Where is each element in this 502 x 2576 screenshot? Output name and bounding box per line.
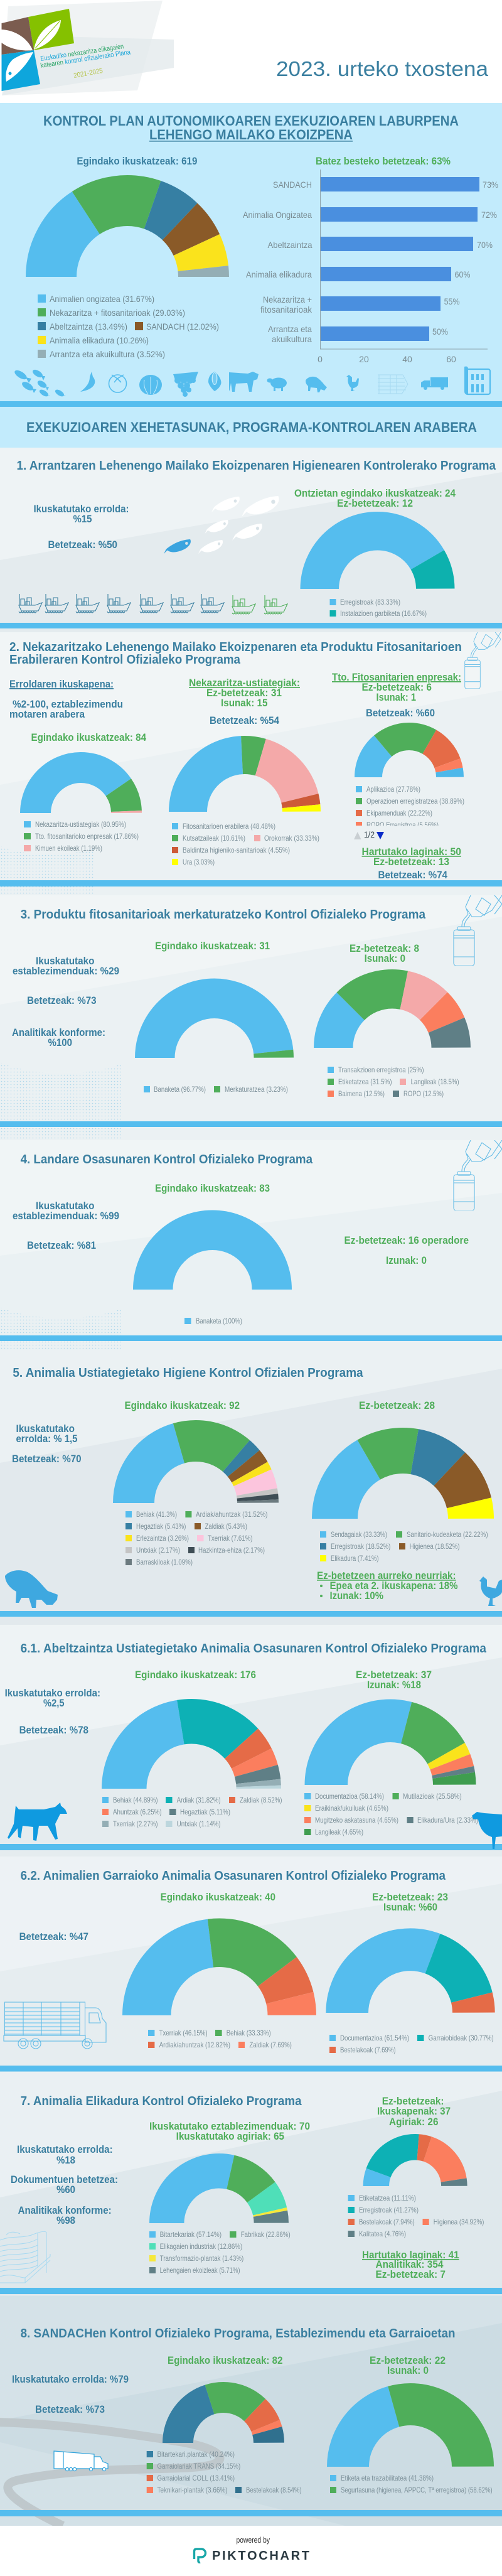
legend: farm donut	[172, 822, 319, 866]
stat: inspections 31: Egindako ikuskatzeak: 31	[155, 940, 270, 952]
legend: species donut: Ardiak/ahuntzak (31.52%)	[196, 1510, 268, 1519]
road	[0, 2422, 220, 2526]
stats: pesticide companies: Ez-betetzeak: 6	[361, 681, 432, 693]
stats: census: Ikuskatutako errolda:	[17, 2143, 113, 2155]
legend: species donut: Zaldiak (5.43%)	[205, 1522, 247, 1531]
icon: sheep	[472, 1812, 502, 1849]
legend: non compliance donut: Baimena (12.5%)	[338, 1089, 385, 1098]
legend: livestock donut: Ahuntzak (6.25%)	[113, 1808, 162, 1816]
stats: non compliance	[344, 1234, 469, 1266]
stats: non compliance: Isunak: %60	[383, 1901, 437, 1913]
chart: establishment donut	[35, 768, 127, 813]
stats: non compliance: Ez-betetzeak: 8	[350, 942, 419, 954]
legend: summary donut: Abeltzaintza (13.49%)	[50, 321, 127, 331]
stats: samples: Ez-betetzeak: 13	[373, 856, 449, 868]
stats: census: Betetzeak: %70	[12, 1453, 82, 1465]
icon: pesticide bottle	[454, 1140, 502, 1210]
stats: census and compliance: %15	[73, 513, 92, 525]
stats: non compliance: Izunak: 0	[386, 1254, 427, 1266]
legend: non compliance donut: Transakzioen erregistroa (25%)	[338, 1065, 424, 1074]
logo: Euskadiko nekazaritza elikagaien	[40, 43, 124, 63]
legend: boat donut: Instalazioen garbiketa (16.67%)	[340, 609, 427, 618]
chart: compliance bars: 60%	[454, 269, 471, 279]
legend: summary donut: SANDACH (12.02%)	[146, 321, 219, 331]
chart: compliance bars: Animalia elikadura	[246, 269, 312, 279]
legend: species donut: Hazkintza-ehiza (2.17%)	[198, 1546, 265, 1555]
legend: non compliance donut	[329, 2034, 494, 2054]
icon: truck	[421, 377, 448, 390]
stats: non compliance: Izunak: %18	[367, 1679, 421, 1691]
stats: samples: Hartutako laginak: 50	[361, 846, 461, 858]
stats: establishments: Betetzeak: %81	[27, 1239, 96, 1251]
legend: non compliance donut: Langileak (18.5%)	[411, 1077, 459, 1086]
stats: pesticide companies	[332, 671, 461, 719]
logo: piktochart: PIKTOCHART	[212, 2549, 309, 2563]
panel: programme 5	[0, 1350, 502, 1625]
stat: inspections: Egindako ikuskatzeak: 619	[77, 155, 197, 167]
legend: farm donut: Kutsatzaileak (10.61%)	[183, 834, 245, 843]
legend: transport donut: Behiak (33.33%)	[227, 2029, 271, 2037]
stats: establishments: establezimenduak: %99	[13, 1210, 119, 1222]
legend: non compliance donut: Sendagaiak (33.33%)	[331, 1530, 387, 1539]
chart: compliance bars: akuikultura	[272, 334, 312, 344]
icon: vending machine	[464, 367, 490, 394]
icon: feed stack	[0, 2231, 50, 2283]
legend: farm donut: Ura (3.03%)	[183, 858, 215, 866]
panel: programme 1	[0, 448, 502, 632]
icon: pig	[306, 377, 327, 392]
legend: SANDACH donut	[147, 2450, 302, 2494]
stats: census	[12, 1423, 82, 1465]
icon: goat	[8, 1803, 67, 1841]
stats: census: Betetzeak: %78	[19, 1724, 88, 1736]
stats: census review: Erroldaren ikuskapena:	[9, 678, 114, 690]
measures list: Epea eta 2. ikuskapena: 18%	[330, 1580, 458, 1592]
legend: non compliance donut: Elikadura/Ura (2.33%)	[417, 1816, 478, 1824]
heading: summary: LEHENGO MAILAKO EKOIZPENA	[149, 127, 353, 143]
icon: grapes	[173, 372, 198, 397]
title: programme 6.1: 6.1. Abeltzaintza Ustiategietako Animalia Osasunaren Kontrol Ofizialeko Programa	[21, 1642, 487, 1656]
icon: lettuce	[139, 375, 162, 395]
stats: non compliance: Ikuskapenak: 37	[377, 2105, 451, 2117]
chart: compliance bars: 55%	[444, 296, 460, 306]
legend: farm donut: Fitosanitarioen erabilera (48.48%)	[183, 822, 275, 831]
panel: programme 2	[0, 632, 502, 895]
legend: feed establishment donut: Fabrikak (22.86%)	[241, 2230, 291, 2239]
panel: programme 6.1	[0, 1625, 502, 1857]
logo: katearen kontrol ofizialerako Plana	[40, 48, 132, 70]
stats: samples: Ez-betetzeak: 7	[375, 2268, 446, 2280]
stat: non compliance 28: Ez-betetzeak: 28	[359, 1399, 435, 1411]
stats: boat inspections	[294, 487, 456, 509]
title: programme 6.2: 6.2. Animalien Garraioko Animalia Osasunaren Kontrol Ofizialeko Programa	[21, 1869, 446, 1883]
icon: pesticide bottle	[465, 632, 501, 689]
legend: non compliance donut: Mutilazioak (25.58%)	[403, 1792, 462, 1801]
stats: census	[11, 2143, 118, 2226]
legend: transport donut: Txerriak (46.15%)	[159, 2029, 208, 2037]
legend: livestock donut: Hegaztiak (5.11%)	[180, 1808, 230, 1816]
chart: non compliance donut	[348, 2405, 473, 2467]
stats: pesticide companies: Isunak: 1	[376, 691, 416, 703]
stats: non compliance: Ez-betetzeak: 23	[372, 1891, 448, 1903]
icon: boats	[19, 594, 287, 614]
icon: corn	[208, 372, 222, 391]
legend: non compliance donut: Bestelakoak (7.69%)	[340, 2045, 396, 2054]
stats: census	[12, 2373, 129, 2415]
chart: non compliance donut	[326, 1721, 454, 1785]
stats: farms: Betetzeak: %54	[210, 714, 279, 726]
chart: compliance bars: SANDACH	[273, 180, 312, 190]
title: programme 2	[9, 640, 462, 667]
legend: species donut: Hegaztiak (5.43%)	[136, 1522, 186, 1531]
stats: census and compliance: Ikuskatutako errolda:	[34, 503, 129, 515]
panel: summary	[0, 103, 502, 448]
stats: establishments: Analitikak konforme:	[12, 1027, 105, 1038]
legend: boat donut: Erregistroak (83.33%)	[340, 598, 400, 606]
chart: compliance bars: Abeltzaintza	[267, 240, 312, 250]
legend: pesticide company donut: Aplikazioa (27.78%)	[366, 785, 420, 794]
heading: summary: KONTROL PLAN AUTONOMIKOAREN EXEKUZIOAREN LABURPENA	[43, 113, 459, 129]
legend: SANDACH donut: Bestelakoak (8.54%)	[246, 2486, 302, 2494]
legend: plant health donut: Banaketa (100%)	[196, 1317, 242, 1325]
legend: farm donut: Orokorrak (33.33%)	[264, 834, 319, 843]
footer	[0, 2526, 502, 2576]
legend: establishment donut: Nekazaritza-ustiategiak (80.95%)	[35, 820, 126, 829]
chart: compliance bars: 72%	[481, 210, 497, 220]
measures list	[317, 1570, 458, 1602]
stats: census: %98	[56, 2214, 75, 2226]
chart: compliance bars: 60	[446, 354, 456, 364]
legend: non compliance donut: Mugitzeko askatasuna (4.65%)	[315, 1816, 398, 1824]
chart: feed establishment donut	[167, 2171, 271, 2223]
measures list: Izunak: 10%	[330, 1590, 383, 1602]
legend: non compliance donut: Etiketatzea (11.11%)	[359, 2194, 416, 2202]
stats: census: %2,5	[43, 1697, 64, 1709]
legend: SANDACH donut: Garraiolariak TRANS (34.15%)	[157, 2462, 240, 2471]
title: programme 2: 2. Nekazaritzako Lehenengo Mailako Ekoizpenaren eta Produktu Fitosanitarioen	[9, 640, 462, 654]
icon: rooster	[346, 375, 359, 391]
panel: programme 6.2	[0, 1857, 502, 2072]
chart: livestock donut	[124, 1722, 259, 1789]
legend: establishment donut: Tto. fitosanitarioko enpresak (17.86%)	[35, 832, 139, 841]
stats: farms: Ez-betetzeak: 31	[206, 687, 282, 699]
chart: compliance bars: 50%	[432, 326, 448, 337]
stats: non compliance: Ez-betetzeak: 22	[370, 2354, 446, 2366]
legend: livestock donut: Untxiak (1.14%)	[177, 1819, 221, 1828]
logo	[1, 1, 174, 95]
legend: species donut: Untxiak (2.17%)	[136, 1546, 180, 1555]
legend: feed establishment donut	[149, 2230, 291, 2275]
stats: establishments: Ikuskatutako	[36, 1200, 94, 1212]
legend: non compliance donut: ROPO (12.5%)	[403, 1089, 444, 1098]
stats: establishments: Betetzeak: %73	[27, 994, 97, 1006]
stats: farms: Isunak: 15	[221, 697, 267, 709]
chart: compliance bars: Nekazaritza +	[263, 294, 312, 304]
stats: boat inspections: Ez-betetzeak: 12	[337, 497, 413, 509]
legend: transport donut	[148, 2029, 292, 2049]
icon: rooster	[479, 1576, 502, 1606]
stats: non compliance: Isunak: 0	[387, 2364, 429, 2376]
chart: compliance bars: 40	[402, 354, 412, 364]
chart: compliance bars: 70%	[477, 240, 493, 250]
legend: SANDACH donut: Bitartekari.plantak (40.24%)	[157, 2450, 235, 2459]
legend: non compliance donut: Documentazioa (58.14%)	[315, 1792, 384, 1801]
legend: marketing donut: Merkaturatzea (3.23%)	[225, 1085, 288, 1094]
legend: species donut: Erlezaintza (3.26%)	[136, 1534, 189, 1543]
stat: inspections 176: Egindako ikuskatzeak: 176	[135, 1669, 256, 1681]
stats: census review: %2-100, eztablezimendu	[13, 698, 123, 710]
chart: compliance bars: 0	[318, 354, 323, 364]
chart: farm donut	[188, 755, 301, 812]
stats: samples: Hartutako laginak: 41	[362, 2249, 459, 2261]
stats: samples	[362, 2249, 459, 2280]
legend: summary donut: Arrantza eta akuikultura (3.52%)	[50, 349, 165, 359]
chart: pesticide company donut	[368, 736, 450, 777]
stats: establishments: establezimenduak: %29	[13, 965, 119, 977]
stats: establishments: Ikuskatutako	[36, 955, 94, 967]
chart: transport donut	[147, 1943, 292, 2015]
chart: plant health donut	[153, 1230, 272, 1290]
legend: summary donut: Animalia elikadura (10.26%)	[50, 335, 149, 345]
legend: non compliance donut: Kalitatea (4.76%)	[359, 2229, 406, 2238]
stats: census review: motaren arabera	[9, 708, 85, 720]
icon: pesticide bottle	[454, 895, 502, 966]
legend: SANDACH donut: Garraiolarial COLL (13.41%)	[157, 2474, 235, 2482]
legend: plant health donut	[184, 1317, 242, 1325]
powered by: powered by	[236, 2535, 270, 2545]
legend: marketing donut: Banaketa (96.77%)	[154, 1085, 206, 1094]
title: programme 8: 8. SANDACHen Kontrol Ofizialeko Programa, Establezimendu eta Garraioetan	[21, 2327, 456, 2341]
panel: programme 4	[0, 1140, 502, 1350]
stats: samples: Betetzeak: %74	[378, 869, 447, 881]
stats: census: Betetzeak: %73	[35, 2403, 105, 2415]
stat: inspections 84: Egindako ikuskatzeak: 84	[31, 731, 146, 743]
stats: non compliance: Ez-betetzeak: 16 operadore	[344, 1234, 469, 1246]
stats: census: errolda: % 1,5	[16, 1433, 78, 1445]
legend: non compliance donut: Documentazioa (61.54%)	[340, 2034, 409, 2042]
legend: summary donut: Animalien ongizatea (31.67%)	[50, 294, 154, 304]
legend: SANDACH donut: Teknikari-plantak (3.66%)	[157, 2486, 227, 2494]
stats: samples: Analitikak: 354	[375, 2258, 444, 2270]
icon: sheep	[267, 378, 287, 391]
legend: non compliance donut: Elikadura (7.41%)	[331, 1554, 379, 1563]
legend: summary donut	[38, 294, 219, 359]
legend: boat donut	[330, 598, 427, 618]
stats: non compliance: Agiriak: 26	[389, 2116, 438, 2128]
stats: farms: Nekazaritza-ustiategiak:	[189, 677, 300, 689]
legend: non compliance donut: Erregistroak (41.27%)	[359, 2206, 419, 2214]
legend: pesticide company donut: ROPO Erregistroa (5.56%)	[366, 821, 439, 829]
legend: establishment donut	[24, 820, 139, 853]
icon: fish shoal	[164, 496, 279, 554]
chart: boat donut	[319, 531, 435, 589]
stats: establishments: %100	[48, 1037, 72, 1048]
legend: non compliance donut	[304, 1792, 478, 1836]
legend: feed establishment donut: Elikagaien industriak (12.86%)	[160, 2242, 242, 2251]
legend: pesticide company donut: Operazioen erregistratzea (38.89%)	[366, 797, 464, 806]
legend: feed establishment donut: Transformazio-plantak (1.43%)	[160, 2254, 243, 2263]
stats: census and compliance	[34, 503, 129, 551]
legend: non compliance donut	[320, 1530, 488, 1563]
stat: average compliance: Batez besteko betetzeak: 63%	[316, 155, 451, 167]
chart: species donut	[134, 1441, 258, 1503]
chart: non compliance donut	[335, 1450, 471, 1519]
legend: pesticide company donut	[356, 786, 464, 826]
chart: non compliance donut	[333, 989, 451, 1048]
title: programme 3: 3. Produktu fitosanitarioak merkaturatzeko Kontrol Ofizialeko Programa	[21, 908, 426, 922]
measures list: Ez-betetzeen aurreko neurriak:	[317, 1570, 456, 1582]
stats: census: Ikuskatutako errolda: %79	[12, 2373, 129, 2385]
legend: species donut: Behiak (41.3%)	[136, 1510, 177, 1519]
legend: livestock donut	[102, 1796, 282, 1828]
legend: non compliance donut	[348, 2194, 484, 2238]
legend: non compliance donut	[330, 2474, 493, 2494]
chart: SANDACH donut	[178, 2398, 269, 2443]
legend: non compliance donut: Higienea (34.92%)	[434, 2218, 484, 2226]
stats: non compliance: Ez-betetzeak:	[382, 2095, 444, 2107]
stat: inspections 40: Egindako ikuskatzeak: 40	[161, 1891, 275, 1903]
legend: species donut: Txerriak (7.61%)	[208, 1534, 253, 1543]
stats: census: %18	[56, 2154, 75, 2166]
stats: non compliance	[350, 942, 419, 964]
icon: livestock truck	[4, 2002, 106, 2049]
icon: delivery truck	[54, 2451, 108, 2471]
legend: non compliance donut: Higienea (18.52%)	[410, 1542, 460, 1551]
chart: marketing donut	[155, 998, 274, 1058]
legend: non compliance donut: Etiketa eta trazabilitatea (41.38%)	[341, 2474, 434, 2482]
icon: chili pepper	[80, 372, 95, 392]
title: programme 2: Erabileraren Kontrol Ofizialeko Programa	[9, 653, 241, 667]
stat: inspections 92: Egindako ikuskatzeak: 92	[124, 1399, 240, 1411]
legend: summary donut: Nekazaritza + fitosanitarioak (29.03%)	[50, 308, 185, 318]
panel: programme 7	[0, 2072, 502, 2296]
logo: 2021-2025	[73, 67, 104, 80]
stats: establishments	[13, 1200, 119, 1251]
icon: pig	[5, 1570, 58, 1608]
stats: census: Analitikak konforme:	[18, 2204, 112, 2216]
title: programme 5: 5. Animalia Ustiategietako Higiene Kontrol Ofizialen Programa	[13, 1366, 363, 1380]
legend: feed establishment donut: Bitartekariak (57.14%)	[160, 2230, 222, 2239]
legend: transport donut: Ardiak/ahuntzak (12.82%)	[159, 2040, 230, 2049]
stats: inspected	[149, 2120, 310, 2142]
title: programme 4: 4. Landare Osasunaren Kontrol Ofizialeko Programa	[21, 1153, 313, 1167]
legend: transport donut: Zaldiak (7.69%)	[249, 2040, 292, 2049]
stats: non compliance	[372, 1891, 448, 1913]
stats: non compliance	[370, 2354, 446, 2376]
legend: species donut	[125, 1510, 268, 1566]
legend: pesticide company donut: Ekipamenduak (22.22%)	[366, 809, 432, 817]
chart: compliance bars: Animalia Ongizatea	[243, 210, 312, 220]
stats: inspected: Ikuskatutako agiriak: 65	[176, 2130, 284, 2142]
chart: compliance bars: 20	[359, 354, 369, 364]
legend pager: 1/2	[364, 829, 375, 839]
legend: non compliance donut: Bestelakoak (7.94%)	[359, 2218, 415, 2226]
chart: compliance bars: Arrantza eta	[268, 324, 312, 334]
stats: farms	[189, 677, 300, 726]
legend: farm donut: Baldintza higieniko-sanitarioak (4.55%)	[183, 846, 290, 854]
stats: census: Ikuskatutako errolda:	[5, 1687, 100, 1699]
panel: programme 8	[0, 2296, 502, 2526]
legend: non compliance donut: Erregistroak (18.52%)	[331, 1542, 390, 1551]
icon: school of fish	[13, 368, 66, 398]
stat: inspections 82: Egindako ikuskatzeak: 82	[168, 2354, 282, 2366]
stats: pesticide companies: Betetzeak: %60	[366, 707, 435, 719]
legend: non compliance donut: Etiketatzea (31.5%)	[338, 1077, 392, 1086]
icon: stack	[378, 375, 408, 394]
header	[0, 0, 502, 103]
legend: marketing donut	[144, 1085, 288, 1094]
stats: non compliance: Ez-betetzeak: 37	[356, 1669, 432, 1681]
legend: non compliance donut: Eraikinak/ukuiluak (4.65%)	[315, 1804, 388, 1813]
stats: non compliance	[356, 1669, 432, 1691]
stats: census	[5, 1687, 100, 1736]
stat: inspections 83: Egindako ikuskatzeak: 83	[155, 1182, 270, 1194]
chart: compliance bars: fitosanitarioak	[260, 304, 312, 315]
legend: livestock donut: Txerriak (2.27%)	[113, 1819, 158, 1828]
stats: census and compliance: Betetzeak: %50	[48, 539, 117, 551]
stat: compliance 47: Betetzeak: %47	[19, 1931, 88, 1943]
stats: census review	[9, 678, 123, 720]
legend: feed establishment donut: Lehengaien ekoizleak (5.71%)	[160, 2266, 240, 2275]
chart: non compliance donut	[376, 2147, 454, 2186]
stats: census: Dokumentuen betetzea:	[11, 2174, 118, 2185]
stats: pesticide companies: Tto. Fitosanitarien enpresak:	[332, 671, 461, 683]
legend: non compliance donut	[328, 1065, 459, 1098]
title: programme 7: 7. Animalia Elikadura Kontrol Ofizialeko Programa	[21, 2094, 302, 2108]
icon: tomato	[109, 375, 127, 392]
icon: cow	[229, 372, 259, 392]
legend pager	[354, 829, 384, 839]
chart: compliance bars	[243, 170, 498, 364]
legend: species donut: Barraskiloak (1.09%)	[136, 1558, 193, 1566]
legend: non compliance donut: Langileak (4.65%)	[315, 1828, 363, 1836]
heading: summary	[43, 113, 459, 143]
chart: semi donut summary	[51, 201, 203, 277]
report title: 2023. urteko txostena	[276, 57, 489, 80]
stats: non compliance	[377, 2095, 451, 2128]
stats: non compliance: Isunak: 0	[365, 952, 405, 964]
stats: census: %60	[56, 2184, 75, 2196]
chart: non compliance donut	[347, 1949, 474, 2013]
legend: livestock donut: Behiak (44.89%)	[113, 1796, 158, 1804]
legend: establishment donut: Kimuen ekoileak (1.19%)	[35, 844, 102, 853]
chart: compliance bars: 73%	[483, 180, 498, 190]
legend: livestock donut: Zaldiak (8.52%)	[240, 1796, 282, 1804]
stats: samples	[361, 846, 461, 881]
panel: programme 3	[0, 895, 502, 1140]
stats: boat inspections: Ontzietan egindako ikuskatzeak: 24	[294, 487, 456, 499]
legend: livestock donut: Ardiak (31.82%)	[177, 1796, 221, 1804]
stats: establishments	[12, 955, 119, 1048]
stats: census: Ikuskatutako	[16, 1423, 75, 1435]
stats: inspected: Ikuskatutako eztablezimenduak: 70	[149, 2120, 310, 2132]
